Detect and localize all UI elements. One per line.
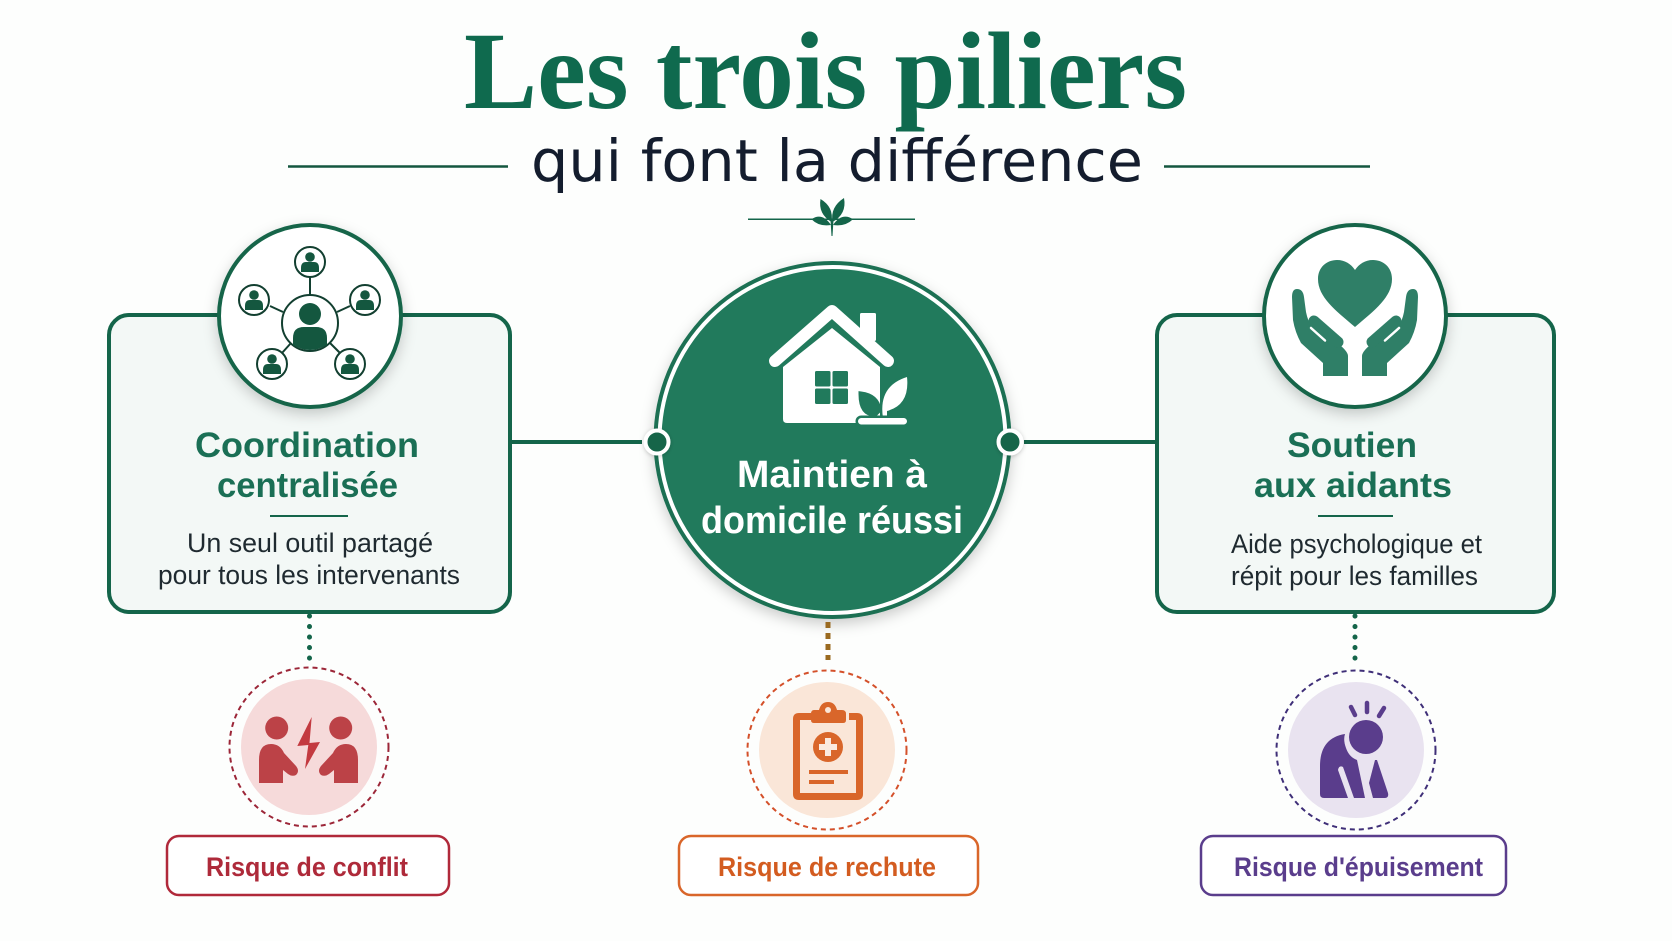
- description: Un seul outil partagé: [187, 528, 433, 558]
- risk: conflit: [167, 668, 449, 895]
- dotted connector: centre: [826, 622, 830, 660]
- label: domicile réussi: [701, 500, 963, 542]
- dotted connector: right: [1352, 616, 1358, 660]
- description: Aide psychologique et: [1231, 529, 1483, 559]
- heading: Coordination: [195, 426, 419, 465]
- heading: aux aidants: [1254, 466, 1452, 505]
- panel: maintien à domicile réussi: [646, 261, 1022, 619]
- icon: care network: [219, 225, 401, 407]
- label: risque de rechute: Risque de rechute: [718, 852, 936, 882]
- label: [701, 454, 963, 542]
- description: pour tous les intervenants: [158, 560, 460, 590]
- label: Maintien à: [737, 454, 928, 496]
- description: répit pour les familles: [1231, 561, 1478, 591]
- description: [158, 528, 460, 590]
- icon: medical clipboard: [793, 702, 863, 800]
- label: risque de rechute: [679, 836, 978, 895]
- heading: [1254, 426, 1452, 505]
- label: risque d'épuisement: Risque d'épuisement: [1234, 852, 1483, 882]
- panel: soutien aux aidants: [1157, 225, 1554, 612]
- dotted connector: left: [307, 616, 312, 660]
- heading: centralisée: [217, 466, 398, 505]
- description: [1231, 529, 1483, 591]
- panel: coordination centralisée: [109, 225, 510, 612]
- icon: leaf ornament: [748, 198, 915, 236]
- icon: conflict: [259, 716, 358, 783]
- label: risque de conflit: Risque de conflit: [206, 852, 408, 882]
- label: risque de conflit: [167, 836, 449, 895]
- risk: rechute: [679, 670, 978, 895]
- title: Les trois piliers: [464, 10, 1187, 132]
- icon: exhausted person: [1320, 703, 1388, 798]
- risk: épuisement: [1201, 670, 1506, 895]
- label: risque d'épuisement: [1201, 836, 1506, 895]
- heading: Soutien: [1287, 426, 1417, 465]
- icon: hands holding heart: [1264, 225, 1446, 407]
- connector node: left: [646, 430, 668, 454]
- icon: house with plant: [775, 311, 907, 424]
- subtitle: qui font la différence: [531, 127, 1143, 195]
- connector node: right: [998, 430, 1022, 454]
- connector: centre to right card: [1024, 440, 1157, 444]
- connector: left card to centre: [511, 440, 642, 444]
- heading: [195, 426, 419, 505]
